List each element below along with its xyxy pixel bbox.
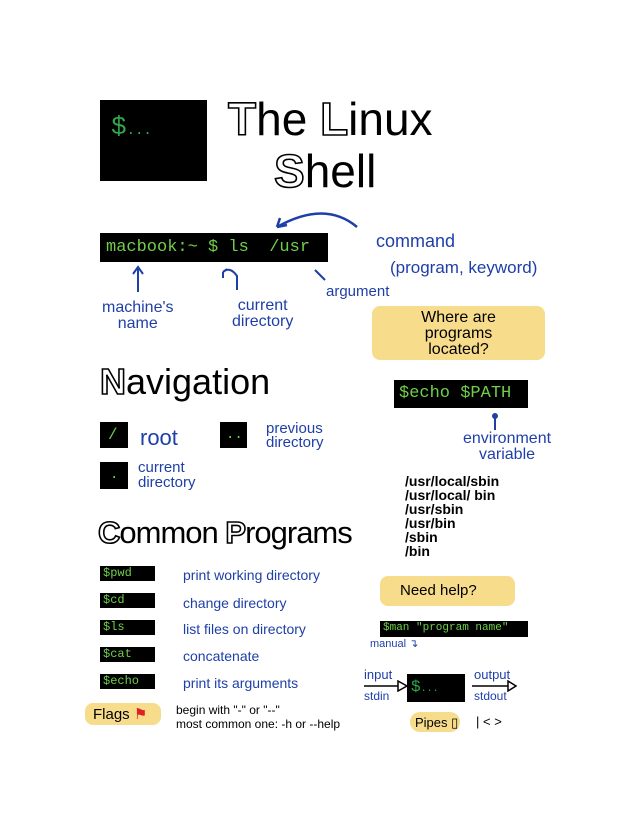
path list: /usr/local/sbin xyxy=(405,473,499,489)
man command: $man "program name" xyxy=(383,622,508,634)
highlight flags xyxy=(85,703,161,725)
nav: current: directory xyxy=(138,474,196,491)
highlight: where are programs: Where are xyxy=(421,309,496,326)
highlight need help: Need help? xyxy=(400,582,477,599)
flags text xyxy=(176,703,340,731)
highlight pipes xyxy=(410,712,460,732)
nav: root: root xyxy=(140,425,178,450)
echo PATH: $echo $PATH xyxy=(399,384,511,403)
path list: /usr/sbin xyxy=(405,501,463,517)
programs list: concatenate xyxy=(183,648,259,664)
flags text: begin with "-" or "--" xyxy=(176,703,280,717)
pipe symbols: | < > xyxy=(476,714,502,729)
machine's name label: name xyxy=(118,315,158,332)
environment variable label: environment xyxy=(463,430,551,447)
nav: previous: directory xyxy=(266,434,324,451)
pipe diagram: stdin xyxy=(364,689,389,703)
nav: root xyxy=(100,422,178,450)
command label: command xyxy=(376,231,455,251)
current directory label: directory xyxy=(232,313,293,330)
programs list: $ls xyxy=(103,620,125,634)
highlight: where are programs: located? xyxy=(428,341,489,358)
current directory label xyxy=(232,297,294,330)
pipe diagram: output xyxy=(474,667,510,682)
arrow env xyxy=(492,413,498,430)
environment variable label xyxy=(463,430,551,463)
flags text: most common one: -h or --help xyxy=(176,717,340,731)
echo PATH xyxy=(394,380,528,408)
highlight need help xyxy=(380,576,515,606)
command prompt bar xyxy=(100,233,328,262)
nav: previous: .. xyxy=(226,427,243,443)
highlight flags: Flags ⚑ xyxy=(93,706,147,723)
heading common programs: Common Programs xyxy=(98,515,352,550)
path list: /usr/bin xyxy=(405,515,456,531)
command prompt bar: macbook:~ $ ls /usr xyxy=(106,238,310,257)
pipe diagram xyxy=(364,667,518,703)
heading navigation: Navigation xyxy=(100,361,270,402)
manual label: manual ↴ xyxy=(370,638,418,650)
path list: /bin xyxy=(405,543,430,559)
path list xyxy=(405,473,499,559)
arrow: command xyxy=(276,212,358,228)
pipe diagram: stdout xyxy=(474,689,507,703)
programs list: list files on directory xyxy=(183,621,306,637)
arrows up xyxy=(132,265,326,292)
nav: current: current xyxy=(138,459,185,476)
nav: previous: previous xyxy=(266,420,323,437)
programs list: $cat xyxy=(103,647,132,661)
terminal icon xyxy=(100,100,207,181)
title: The Linux xyxy=(228,93,433,145)
argument label: argument xyxy=(326,283,389,300)
programs list: print its arguments xyxy=(183,675,298,691)
programs list: $cd xyxy=(103,593,125,607)
text: (program, keyword) xyxy=(390,258,537,277)
pipe diagram: input xyxy=(364,667,392,682)
path list: /usr/local/ bin xyxy=(405,487,495,503)
path list: /sbin xyxy=(405,529,438,545)
highlight: where are programs xyxy=(372,306,545,360)
terminal icon: $... xyxy=(111,112,152,142)
nav: current xyxy=(100,459,196,491)
programs list xyxy=(100,566,320,691)
programs list: $pwd xyxy=(103,566,132,580)
highlight pipes: Pipes ▯ xyxy=(415,715,458,730)
machine's name label: machine's xyxy=(102,299,174,316)
nav: current: . xyxy=(110,467,118,483)
machine's name label xyxy=(102,299,174,332)
title: Shell xyxy=(274,145,376,197)
programs list: $echo xyxy=(103,674,139,688)
pipe diagram: $... xyxy=(411,678,439,696)
programs list: change directory xyxy=(183,595,287,611)
man command xyxy=(380,621,528,637)
current directory label: current xyxy=(238,297,288,314)
title xyxy=(228,93,433,197)
programs list: print working directory xyxy=(183,567,320,583)
nav: previous xyxy=(220,420,324,451)
highlight: where are programs: programs xyxy=(425,325,492,342)
nav: root: / xyxy=(108,426,118,444)
environment variable label: variable xyxy=(479,446,535,463)
